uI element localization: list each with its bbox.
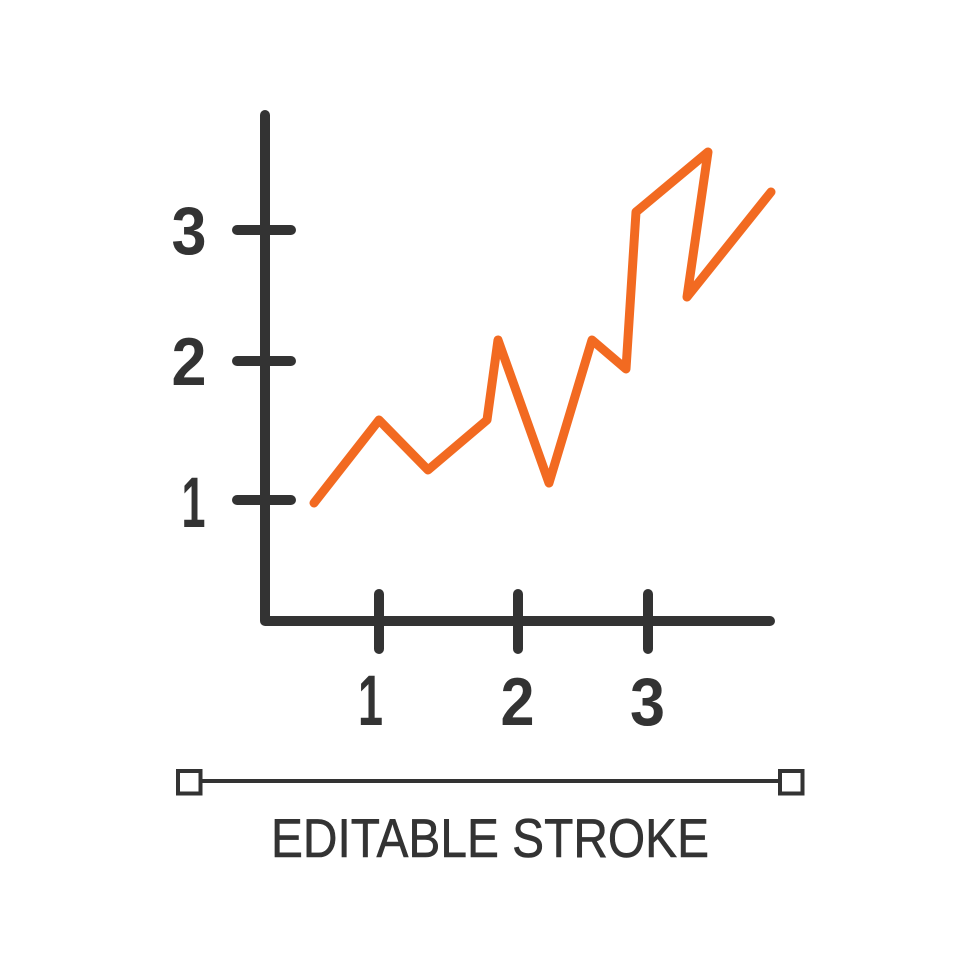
- editable stroke caption: EDITABLE STROKE: [271, 807, 709, 869]
- x axis labels: [358, 662, 665, 741]
- editable stroke handle line: [178, 771, 802, 794]
- chart axes with tick marks: [237, 115, 770, 649]
- y axis labels: 1: [182, 464, 206, 543]
- y axis labels: [172, 193, 206, 543]
- y axis labels: 3: [172, 193, 206, 269]
- x axis labels: 3: [630, 664, 665, 740]
- orange data line: [314, 152, 771, 503]
- y axis labels: 2: [172, 324, 206, 400]
- x axis labels: 1: [358, 662, 383, 741]
- x axis labels: 2: [500, 664, 534, 740]
